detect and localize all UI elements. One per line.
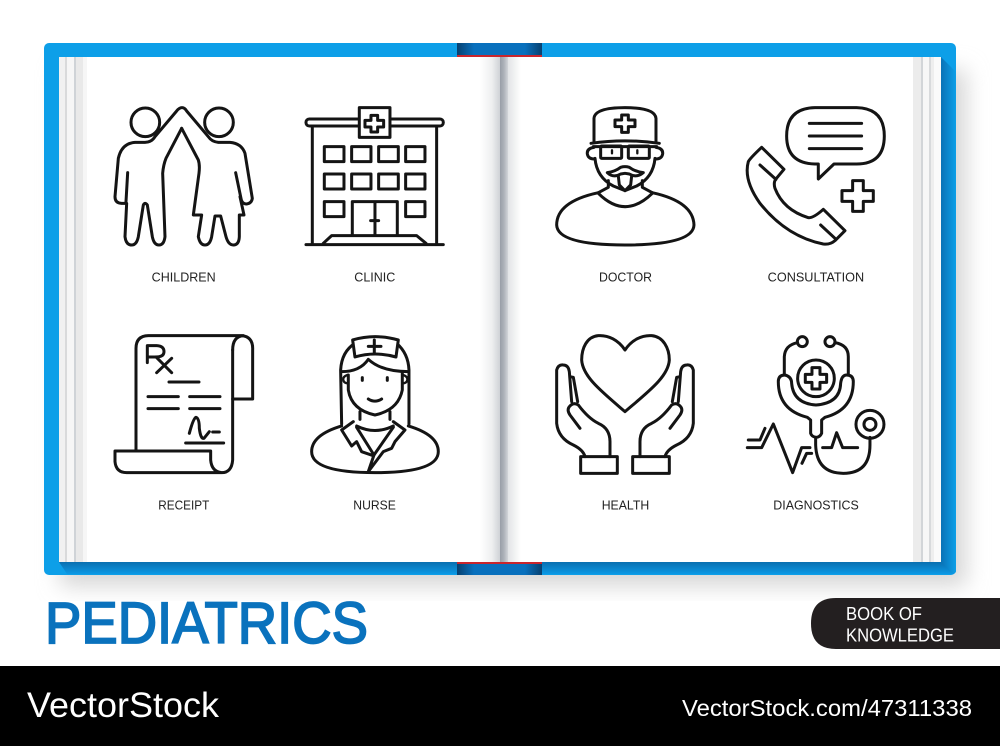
label: doctor: DOCTOR [599, 270, 652, 284]
icon: nurse [312, 337, 438, 473]
label: diagnostics: DIAGNOSTICS [773, 498, 859, 512]
left page edges [59, 57, 87, 562]
label: receipt: RECEIPT [158, 498, 210, 512]
icon: diagnostics [747, 337, 884, 473]
footer bar [0, 666, 1000, 746]
white pages [59, 57, 941, 562]
label: nurse: NURSE [353, 498, 396, 512]
title: PEDIATRICS [45, 591, 368, 656]
icon: children [115, 108, 252, 245]
centre fold [480, 57, 521, 562]
footer url: VectorStock.com/47311338 [682, 695, 972, 721]
label: health: HEALTH [602, 498, 649, 512]
badge: book of knowledge [811, 598, 1000, 649]
footer logo: VectorStock [27, 686, 220, 725]
label: children: CHILDREN [152, 270, 216, 284]
label: clinic: CLINIC [354, 270, 395, 284]
open book [44, 43, 956, 575]
book cover [44, 43, 956, 575]
icon: health [557, 336, 693, 473]
icon: consultation [747, 108, 884, 244]
badge: book of knowledge: KNOWLEDGE [846, 626, 954, 646]
right hand [633, 365, 693, 473]
icon: clinic [306, 108, 443, 245]
bottom cover band [59, 562, 956, 574]
label: consultation: CONSULTATION [768, 270, 864, 284]
left hand [557, 365, 617, 473]
badge: book of knowledge: BOOK OF [846, 604, 922, 624]
page background strip under the book [0, 601, 1000, 666]
spine top [457, 43, 542, 57]
book shadow [60, 70, 966, 586]
icon: receipt [115, 336, 253, 473]
right page edges [913, 57, 941, 562]
icon: doctor [557, 108, 694, 245]
right cover band [941, 57, 956, 574]
spine bottom [457, 562, 542, 575]
